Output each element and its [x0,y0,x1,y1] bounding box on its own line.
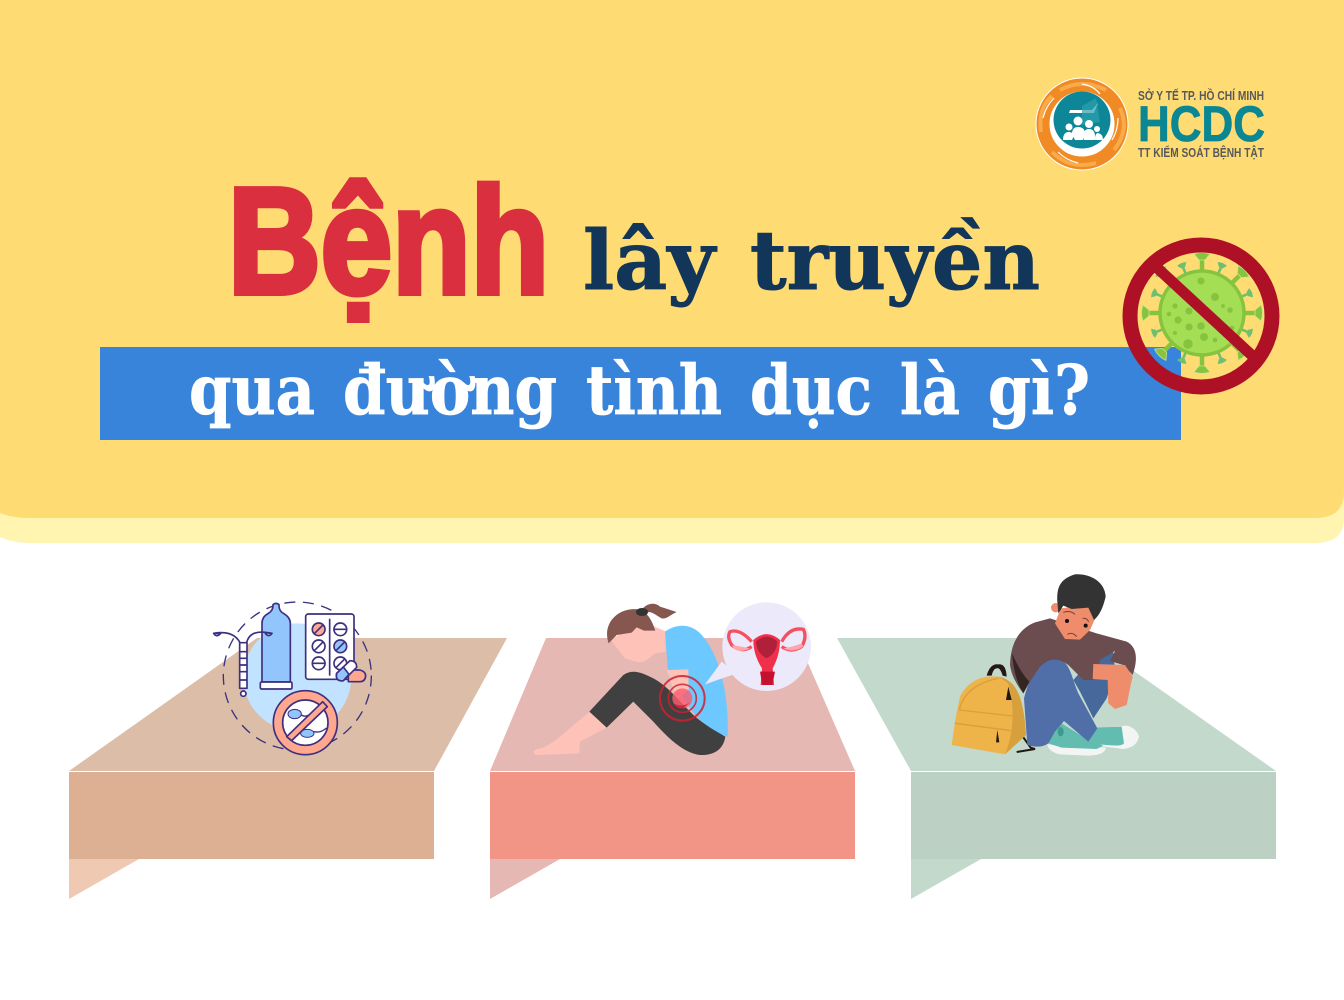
logo text: centre name: TT KIỂM SOÁT BỆNH TẬT [1138,145,1264,160]
pill blister [306,614,366,682]
panel top surface [69,638,507,771]
arm [667,669,689,698]
leggings [589,672,725,755]
panel top surface [490,638,855,771]
leg and foot [534,712,607,755]
banner text: dục [750,351,872,431]
neck and face [611,626,666,662]
panel tail [490,859,560,899]
banner text: qua [189,351,315,431]
panel top surface [837,638,1276,771]
banner text: gì? [988,351,1090,431]
panel front face [911,772,1276,859]
neck and face [1055,605,1097,640]
near leg [1024,658,1097,747]
header band [0,0,1344,543]
logo text: HCDC: HCDC [1138,96,1265,152]
title: lây truyền [583,214,1040,309]
forearm and hands [1093,664,1133,709]
backpack [952,664,1026,754]
logo text: agency: SỞ Y TẾ TP. HỒ CHÍ MINH [1138,88,1264,103]
hair [1057,574,1106,620]
far shoe [1097,726,1139,749]
far leg [1073,651,1115,718]
panel: symptoms [490,602,855,899]
backpack strap [1017,735,1035,752]
banner text [189,351,1090,431]
hair [607,609,655,643]
icon: contraception [214,602,371,755]
panel front face [69,772,434,859]
no-sperm sign [273,691,337,755]
panel: prevention [69,602,507,899]
icon: virus prohibited [1130,245,1272,387]
prohibition ring [1130,245,1272,387]
uterus icon [729,629,805,685]
near shoe [1047,744,1106,756]
ponytail [642,604,677,619]
people [1063,116,1103,140]
blue title banner [100,347,1181,440]
shirt [665,626,728,737]
sweater [1010,618,1136,693]
virus spikes [1142,252,1262,374]
virus body [1160,271,1244,355]
condom [260,603,292,689]
banner text: là [900,351,960,431]
pain rings [660,676,705,721]
illustration: sad boy with backpack [952,574,1139,756]
title: Bệnh: Bệnh [228,156,549,325]
panel tail [911,859,981,899]
panel: impact [837,574,1276,899]
IUD [214,632,272,696]
panel front face [490,772,855,859]
banner text: tình [586,351,722,431]
illustration: woman with pelvic pain [534,602,811,755]
logo emblem [1036,78,1128,170]
title: lây truyền: lây [583,214,717,309]
logo: HCDC [1036,78,1265,170]
banner text: đường [343,351,557,431]
speech bubble [705,662,737,684]
panel tail [69,859,139,899]
title: lây truyền: truyền [750,214,1040,309]
